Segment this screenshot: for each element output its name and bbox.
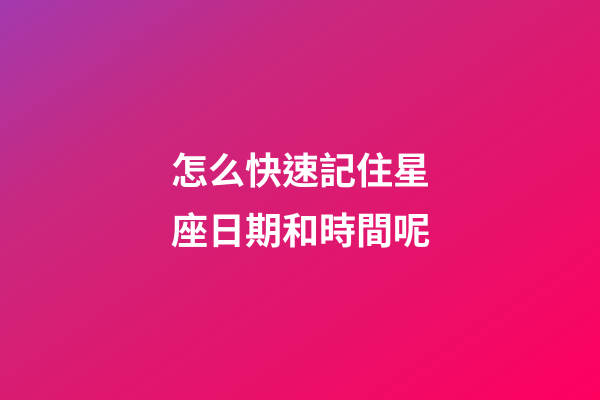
- title line 2: 座日期和時間呢: [171, 211, 430, 252]
- title line 1: 怎么快速記住星: [171, 151, 430, 192]
- title: [171, 151, 430, 252]
